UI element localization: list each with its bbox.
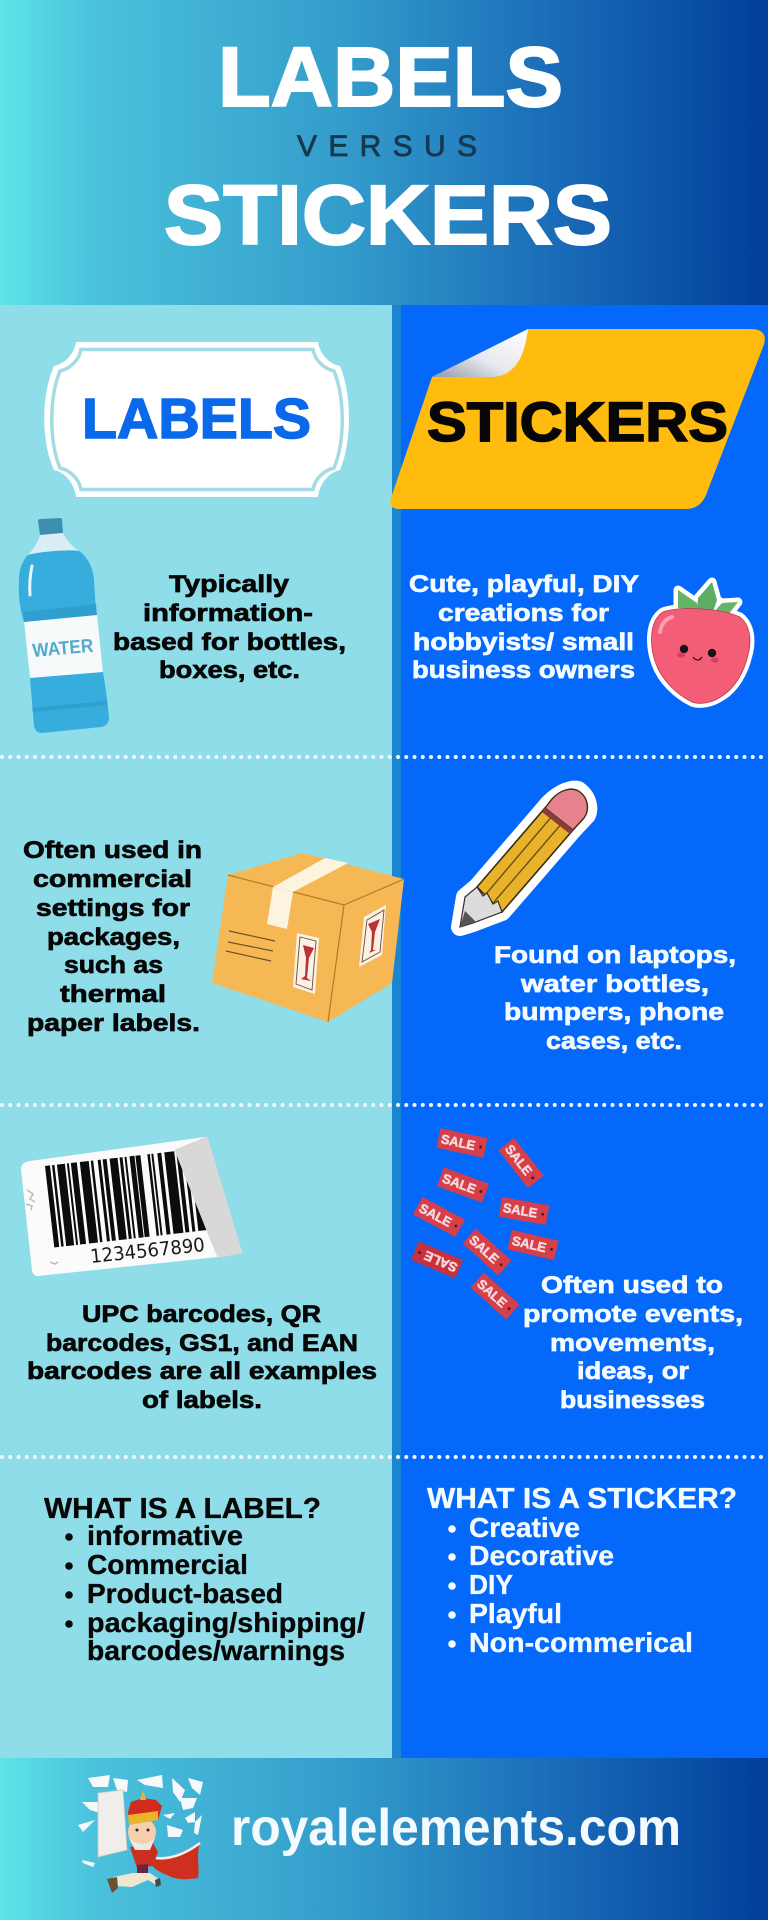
text: labels row 2: settings for [36, 895, 191, 922]
sticker peeled corner [432, 329, 528, 377]
icon: barcode label [21, 1137, 242, 1276]
icon: scattered SALE tags: SALE [417, 1200, 455, 1230]
text: stickers row 3: promote events, [523, 1301, 743, 1328]
list: what is a label: Product-based [87, 1578, 283, 1609]
icon: scattered SALE tags: SALE [421, 1248, 460, 1275]
text: stickers row 1: hobbyists/ small [413, 629, 634, 656]
text: labels row 2: paper labels. [27, 1010, 200, 1037]
text: labels row 3: barcodes, GS1, and EAN [46, 1330, 358, 1357]
list: what is a sticker [427, 1483, 737, 1658]
text: stickers row 1 [409, 571, 639, 684]
divider: row 3 [2, 1455, 768, 1459]
list: what is a sticker: Non-commerical [469, 1627, 693, 1658]
icon: barcode label: 1234567890 [89, 1234, 206, 1268]
divider: row 1 [2, 755, 768, 759]
badge: STICKERS peeling sticker: STICKERS [427, 390, 728, 453]
text: stickers row 1: business owners [412, 657, 635, 684]
text: labels row 2: packages, [47, 924, 180, 951]
text: stickers row 3 [523, 1272, 743, 1414]
icon: water bottle [19, 518, 109, 733]
text: labels row 1: boxes, etc. [159, 657, 300, 684]
icon: water bottle: WATER [32, 636, 94, 662]
divider: row 2 [2, 1103, 768, 1107]
list: what is a sticker: Playful [469, 1598, 562, 1629]
text: stickers row 2 [494, 942, 736, 1055]
footer banner [0, 1758, 768, 1920]
text: labels row 2: commercial [33, 866, 192, 893]
icon: scattered SALE tags: SALE [440, 1171, 478, 1197]
list: what is a label: barcodes/warnings [87, 1635, 345, 1666]
icon: scattered SALE tags: SALE [502, 1200, 539, 1221]
icon: scattered SALE tags: SALE [502, 1142, 535, 1178]
text: labels row 1: based for bottles, [113, 629, 346, 656]
list: what is a sticker: DIY [469, 1569, 513, 1600]
list: what is a sticker: Creative [469, 1512, 580, 1543]
text: stickers row 3: Often used to [541, 1272, 723, 1299]
panel: stickers column background [401, 305, 768, 1758]
header banner [0, 0, 768, 305]
text: stickers row 1: Cute, playful, DIY [409, 571, 639, 598]
text: labels row 1 [113, 571, 346, 684]
text: labels row 3: UPC barcodes, QR [82, 1301, 321, 1328]
list: what is a label: WHAT IS A LABEL? [44, 1493, 321, 1525]
icon: strawberry sticker [652, 582, 750, 703]
text: labels row 1: information- [143, 600, 313, 627]
text: labels row 1: Typically [169, 571, 289, 598]
list: what is a label: packaging/shipping/ [87, 1607, 365, 1638]
text: labels row 2 [23, 837, 202, 1037]
text: labels row 2: such as [64, 952, 163, 979]
text: labels row 3: barcodes are all examples [27, 1358, 377, 1385]
footer website text: royalelements.com [231, 1799, 681, 1857]
list: what is a sticker: WHAT IS A STICKER? [427, 1483, 737, 1515]
list: what is a label: Commercial [87, 1549, 248, 1580]
icon: cardboard box [212, 853, 404, 1022]
icon: scattered SALE tags: SALE [511, 1233, 548, 1255]
panel: labels column background [0, 305, 392, 1758]
text: stickers row 3: businesses [560, 1387, 705, 1414]
badge: LABELS [44, 342, 349, 497]
list: what is a label: informative [87, 1520, 243, 1551]
badge: STICKERS peeling sticker [390, 329, 765, 509]
title: LABELS: LABELS [218, 30, 563, 124]
text: labels row 2: thermal [60, 981, 166, 1008]
icon: pencil sticker [460, 789, 588, 927]
title: STICKERS: STICKERS [164, 168, 612, 262]
icon: king mascot with paper scroll [78, 1775, 203, 1893]
text: labels row 2: Often used in [23, 837, 202, 864]
text: stickers row 1: creations for [438, 600, 610, 627]
icon: scattered SALE tags: SALE [466, 1232, 502, 1267]
text: stickers row 2: water bottles, [520, 971, 709, 998]
text: labels row 3 [27, 1301, 377, 1414]
text: stickers row 2: bumpers, phone [504, 999, 724, 1026]
icon: scattered SALE tags: SALE [440, 1131, 477, 1153]
text: stickers row 2: Found on laptops, [494, 942, 736, 969]
text: stickers row 2: cases, etc. [546, 1028, 682, 1055]
list: what is a label [44, 1493, 365, 1666]
subtitle: VERSUS: VERSUS [297, 130, 477, 163]
list: what is a sticker: Decorative [469, 1540, 614, 1571]
icon: scattered SALE tags [411, 1128, 559, 1319]
panel: column divider [392, 305, 401, 1758]
text: stickers row 3: ideas, or [577, 1358, 690, 1385]
badge: LABELS: LABELS [82, 387, 311, 451]
text: labels row 3: of labels. [142, 1387, 262, 1414]
text: stickers row 3: movements, [550, 1330, 715, 1357]
icon: scattered SALE tags: SALE [474, 1276, 510, 1311]
